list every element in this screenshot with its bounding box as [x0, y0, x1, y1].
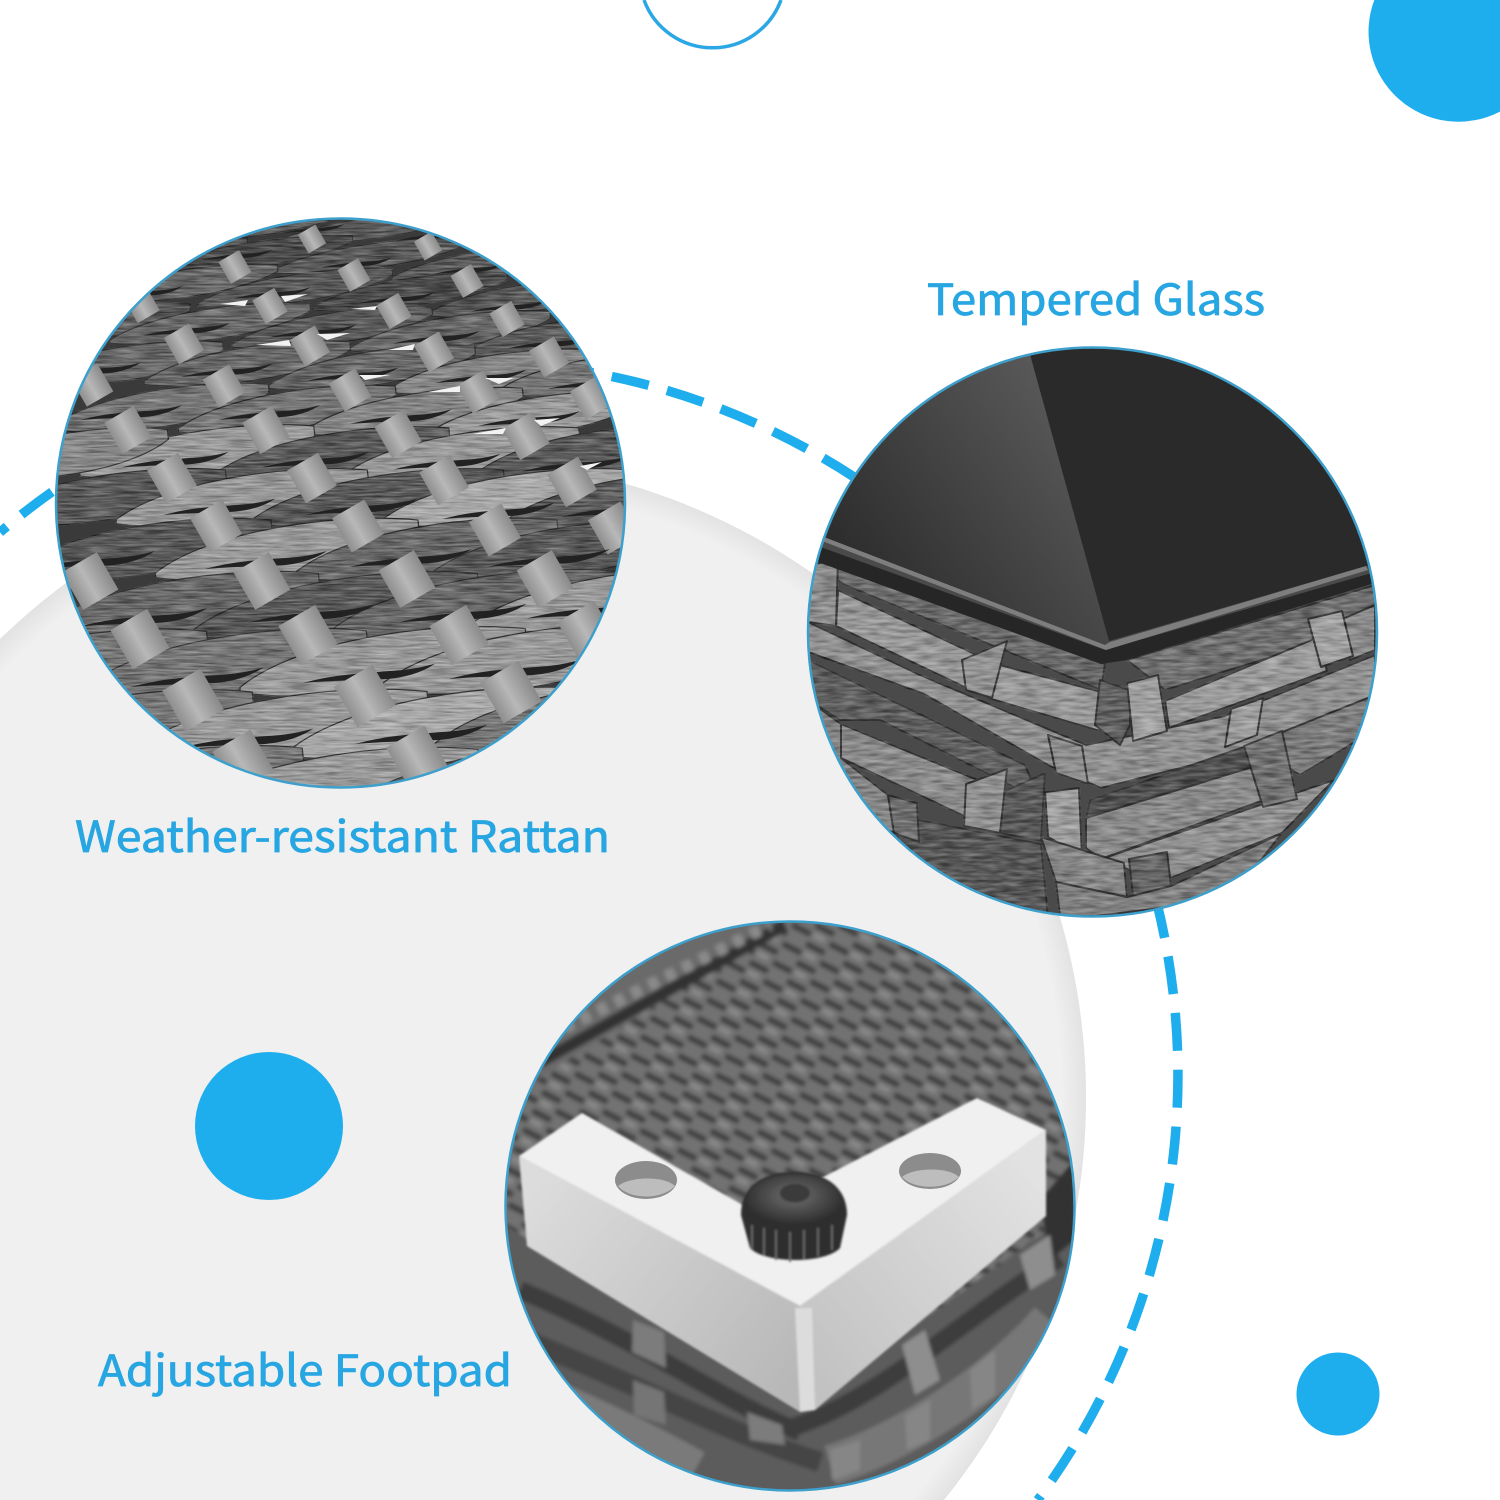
- label: weather-resistant rattan: Weather-resistant Rattan: [75, 803, 610, 865]
- dashed connector ring: [0, 361, 1178, 1500]
- photo: adjustable footpad bracket: [505, 921, 1075, 1491]
- label: adjustable footpad: Adjustable Footpad: [98, 1337, 512, 1399]
- adjustable knob: [741, 1172, 847, 1262]
- metal bracket: [519, 1098, 1046, 1412]
- decorative dot, top right: [1369, 0, 1500, 122]
- large grey background circle: [0, 458, 1086, 1500]
- horizontal rattan strands: [57, 220, 624, 786]
- woven underside: [505, 921, 1075, 1315]
- light gaps in the weave: [220, 294, 602, 470]
- decorative dot, mid left: [195, 1052, 343, 1200]
- mounting holes: [615, 1153, 961, 1199]
- label: tempered glass: Tempered Glass: [927, 266, 1265, 328]
- black glass top: [808, 347, 1378, 664]
- wicker frame: [808, 556, 1375, 916]
- crossing warp strips: [64, 224, 624, 779]
- decorative ring, top: [644, 0, 781, 48]
- decorative dot, bottom right: [1296, 1352, 1380, 1436]
- wicker side bands: [505, 1160, 1075, 1491]
- photo: tempered glass table corner: [808, 347, 1378, 917]
- photo: weather-resistant rattan weave: [54, 217, 626, 789]
